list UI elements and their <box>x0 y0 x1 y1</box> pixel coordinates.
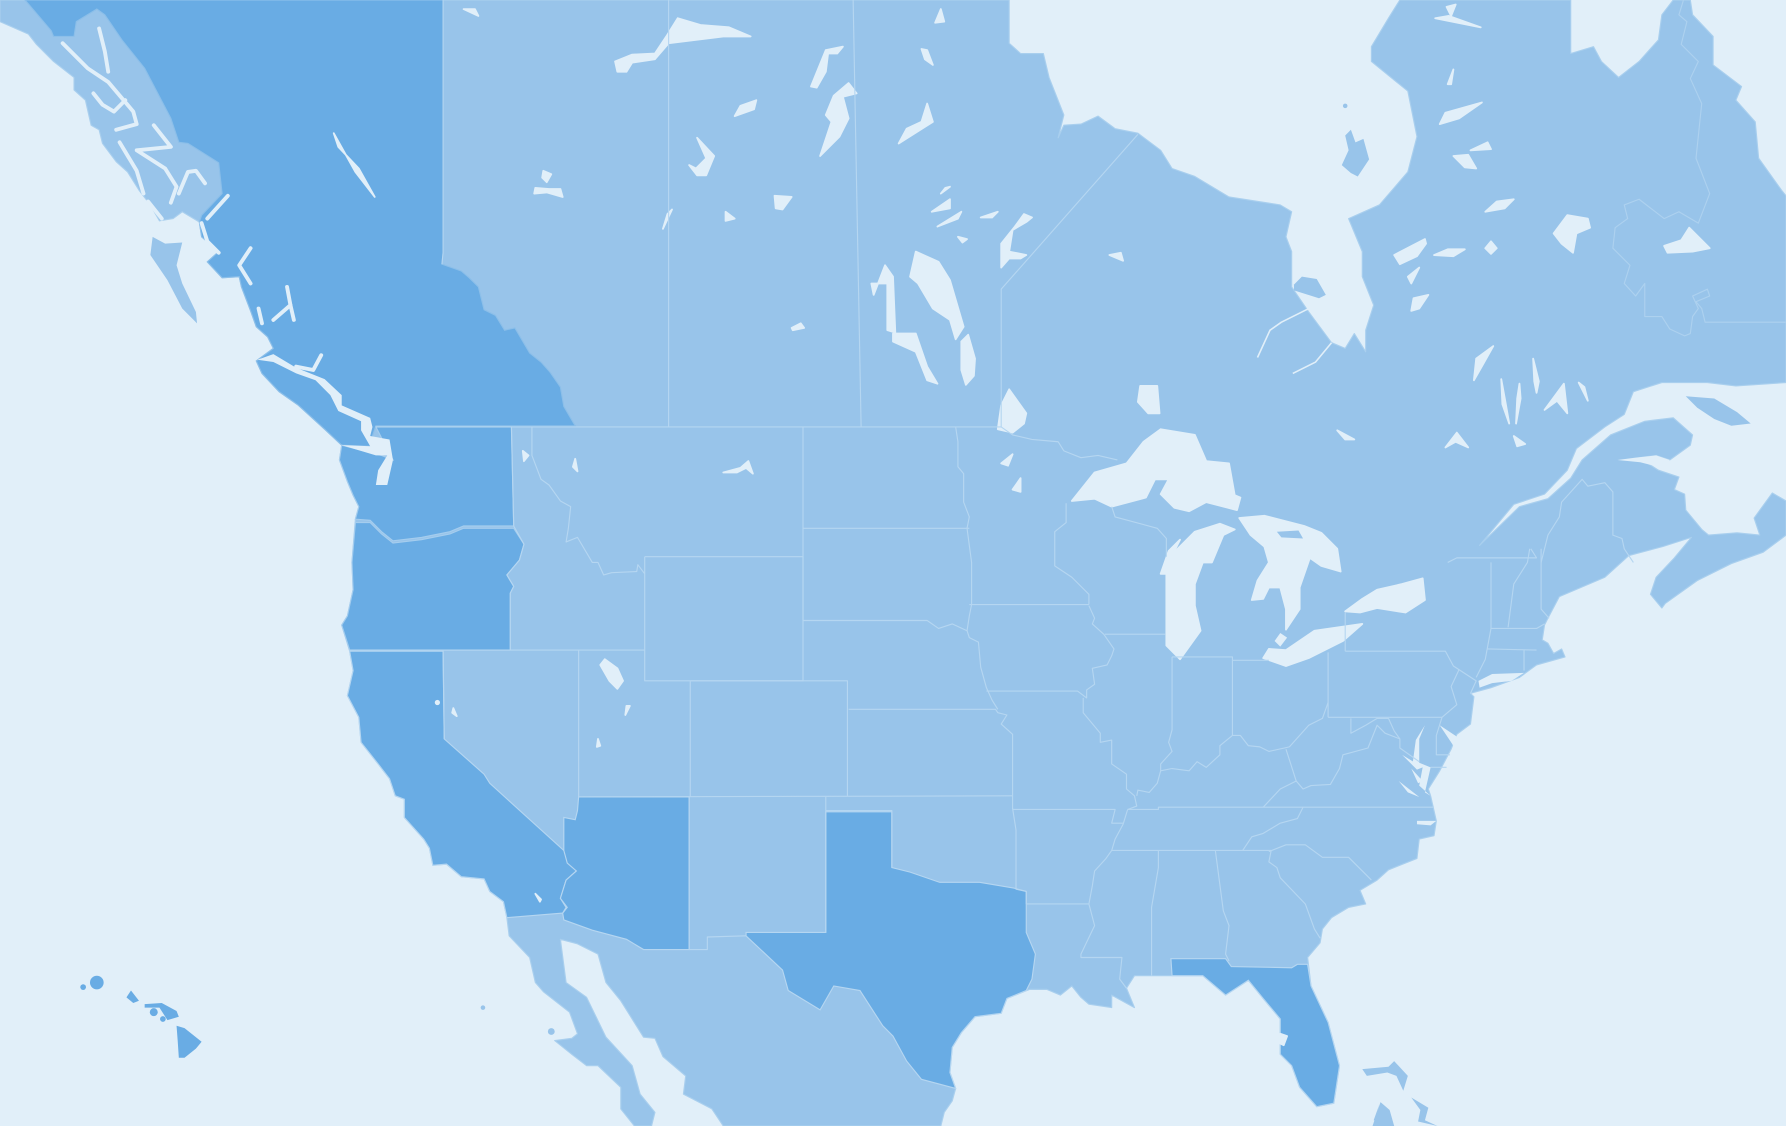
lake: Huron <box>1239 516 1341 630</box>
Saginaw and James Bay islets <box>1275 633 1287 647</box>
region: Texas <box>746 812 1035 1088</box>
lake: Green Bay <box>1161 540 1180 574</box>
lake: Athabasca <box>615 18 751 72</box>
lake: Ontario <box>1345 578 1425 613</box>
lake: Erie <box>1263 624 1362 666</box>
islands: James Bay and Hudson Bay <box>1277 104 1369 539</box>
Bay of Chaleur and Cape Breton water <box>1617 455 1670 467</box>
Chesapeake and Delaware bays <box>1412 725 1431 796</box>
island: Manitoulin <box>1277 531 1303 539</box>
region: Florida <box>1171 959 1340 1107</box>
Long Island Sound <box>1478 673 1524 688</box>
sea channels: straits, fjords and bays <box>257 354 1745 825</box>
region: Oregon <box>342 523 524 650</box>
bay: Tampa <box>1279 1034 1287 1045</box>
boundaries: provinces and states <box>350 0 1633 988</box>
lake: Superior <box>1072 429 1240 511</box>
islands: Haida Gwaii, Anticosti, Long Island and Caribbean <box>150 237 1751 1126</box>
rivers flowing into James Bay <box>1257 309 1332 373</box>
lake: Reindeer <box>820 83 857 156</box>
lake: Winnipeg <box>910 252 964 339</box>
lakes and inland water <box>334 5 1710 1045</box>
region: Arizona <box>560 797 689 950</box>
lakes: northern Manitoba and Ontario <box>899 104 933 143</box>
region: California <box>347 651 576 918</box>
region: Hawaii <box>80 976 202 1058</box>
lakes: United States <box>600 659 623 689</box>
region: Washington <box>339 427 514 541</box>
boundary: Quebec and Labrador <box>1613 0 1786 336</box>
fjords: coast of British Columbia and the panhandle <box>63 28 321 370</box>
lakes: Quebec and Labrador <box>1440 102 1482 124</box>
region: British Columbia <box>25 0 575 446</box>
lake: Michigan <box>1166 524 1235 659</box>
strait of Georgia and Puget Sound <box>257 354 393 485</box>
